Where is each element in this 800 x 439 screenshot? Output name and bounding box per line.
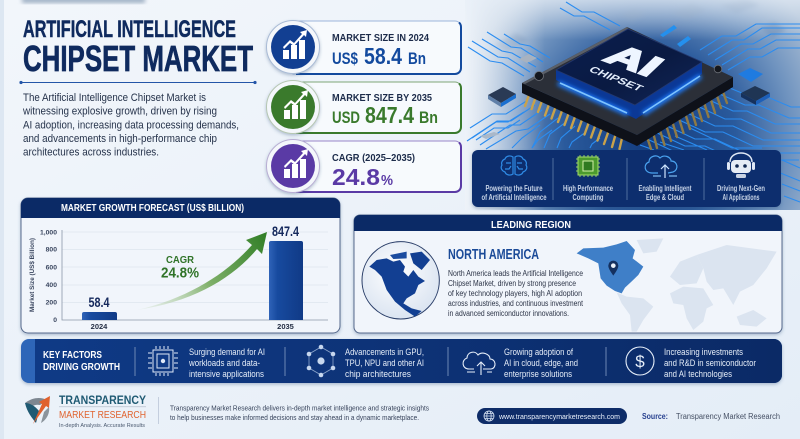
key factors heading: DRIVING GROWTH [43, 362, 120, 373]
stat card: market size 2024: Bn [408, 49, 426, 68]
stat card: CAGR: CAGR (2025–2035) [332, 153, 415, 164]
stat card: market size 2035 [266, 80, 461, 134]
region text: North America leads the Artificial Intelligence [448, 269, 584, 278]
region name: NORTH AMERICA [448, 247, 539, 263]
factor text 4: and AI technologies [664, 369, 732, 379]
footer description: to help businesses make informed decisions and stay ahead in a dynamic marketplace. [170, 413, 419, 422]
feature labels: Computing [572, 193, 604, 202]
logo: transparency market research: TRANSPARENCY [59, 395, 146, 407]
feature labels: Edge & Cloud [646, 193, 684, 202]
icon: dollar: $ [635, 352, 645, 371]
world map [577, 238, 777, 332]
stat card: CAGR: 24.8 [332, 164, 380, 190]
bar values [88, 223, 299, 310]
AI chip [522, 27, 733, 149]
icon: cloud upload [645, 156, 677, 178]
y axis title: Market Size (US$ Billion) [29, 238, 36, 312]
small components [480, 25, 770, 139]
panel: market growth forecast [21, 198, 340, 333]
stat card: market size 2024: US$ [332, 49, 358, 68]
feature labels: Powering the Future [486, 184, 543, 193]
intro text: AI adoption, increasing data processing demands, [23, 120, 239, 132]
icon: growth chart blue [283, 30, 307, 59]
logo mark [25, 396, 50, 424]
icon: network nodes [307, 345, 335, 377]
bar categories: 2024 [91, 322, 108, 331]
factor text 1: intensive applications [189, 369, 264, 379]
y axis [40, 230, 57, 324]
region text: of key technology players, high AI adoption [448, 289, 582, 298]
factor text 1: workloads and data- [188, 358, 260, 368]
feature labels: of Artificial Intelligence [482, 193, 547, 202]
map pin [608, 261, 618, 276]
intro text: The Artificial Intelligence Chipset Market is [23, 92, 206, 104]
y axis: 600 [46, 264, 57, 272]
icon: brain [501, 156, 527, 175]
intro text: and advancements in high-performance chip [23, 133, 217, 145]
chip label CHIPSET: CHIPSET [586, 65, 645, 93]
icon: dollar [626, 347, 654, 375]
chart heading: MARKET GROWTH FORECAST (US$ BILLION) [61, 203, 244, 214]
region heading: LEADING REGION [491, 220, 571, 231]
stat card: market size 2035: Bn [419, 108, 438, 127]
icon: globe [484, 411, 494, 421]
panel: key factors [21, 339, 782, 383]
CAGR label: CAGR [166, 255, 195, 266]
bar 2035 [269, 241, 303, 320]
panel: leading region [354, 215, 782, 333]
intro text [22, 92, 239, 158]
feature labels: Enabling Intelligent [638, 184, 692, 193]
circuit board background [465, 0, 800, 210]
stat card: CAGR: % [381, 172, 393, 189]
y axis: 0 [53, 317, 57, 324]
factor text 4: and R&D in semiconductor [664, 358, 756, 368]
intro text: architectures across industries. [23, 146, 159, 158]
key factors heading [43, 350, 120, 373]
stat card: CAGR [266, 140, 461, 192]
footer description [170, 404, 429, 422]
globe [362, 242, 439, 319]
bar categories: 2035 [277, 322, 294, 331]
feature labels: AI Applications [722, 193, 760, 202]
factor text 3: Growing adoption of [504, 347, 573, 357]
stat card: market size 2035: MARKET SIZE BY 2035 [332, 93, 433, 104]
title: ARTIFICIAL INTELLIGENCE [23, 16, 236, 43]
logo: transparency market research [25, 395, 146, 429]
factor text 3: enterprise solutions [504, 369, 572, 379]
factor text 3: AI in cloud, edge, and [504, 358, 578, 368]
factor text 2: chip architectures [345, 369, 411, 379]
icon: cloud upload [463, 352, 495, 375]
chip label AI: AI [596, 39, 671, 82]
website pill [477, 408, 627, 424]
bar categories [91, 322, 294, 331]
bar values: 58.4 [88, 294, 110, 310]
factor text 3 [504, 347, 578, 379]
stat card: market size 2035: 847.4 [365, 102, 414, 128]
feature labels [482, 184, 765, 202]
stat card: market size 2024: 58.4 [364, 43, 402, 69]
chip hero image [465, 0, 800, 210]
y axis: 800 [46, 246, 57, 254]
factor text 2: Advancements in GPU, [345, 347, 424, 357]
icon: growth chart green [284, 90, 308, 119]
title divider [19, 81, 257, 84]
feature labels: High Performance [563, 184, 613, 193]
icon: chip [148, 346, 178, 376]
stat card: market size 2024 [266, 20, 461, 74]
icon: growth chart purple [284, 149, 308, 178]
intro text: witnessing explosive growth, driven by rising [22, 106, 217, 118]
circuit traces [467, 2, 800, 202]
y axis: 400 [46, 282, 57, 289]
region text [448, 269, 584, 318]
icon: processor [576, 155, 600, 177]
source: Transparency Market Research [676, 412, 780, 421]
source: Source: [642, 412, 668, 421]
icon: robot [727, 153, 755, 178]
stat card: market size 2035: USD [332, 108, 360, 127]
chip pins [525, 92, 727, 149]
feature strip [472, 150, 781, 207]
stat card: market size 2024: MARKET SIZE IN 2024 [332, 33, 430, 44]
factor text 2 [345, 347, 424, 379]
CAGR label [161, 255, 199, 282]
title: CHIPSET MARKET [23, 38, 253, 79]
factor text 1: Surging demand for AI [189, 347, 265, 357]
website pill: www.transparencymarketresearch.com [498, 412, 620, 421]
factor text 2: TPU, NPU and other AI [345, 358, 424, 368]
CAGR label: 24.8% [161, 264, 199, 282]
region text: Chipset Market, driven by strong presence [448, 279, 577, 288]
feature labels: Driving Next-Gen [717, 184, 765, 193]
bar values: 847.4 [272, 223, 299, 239]
factor text 1 [188, 347, 265, 379]
y axis: 1,000 [40, 230, 57, 236]
key factors heading: KEY FACTORS [43, 350, 102, 361]
bar 2024 [82, 312, 117, 320]
y axis: 200 [46, 300, 57, 306]
factor text 4: Increasing investments [664, 347, 743, 357]
growth arrow [137, 232, 267, 310]
logo: transparency market research: In-depth Analysis. Accurate Results [59, 423, 145, 429]
region text: across industries, and continuous investment [448, 299, 584, 308]
footer description: Transparency Market Research delivers in-depth market intelligence and strategic insights [170, 404, 429, 412]
title [23, 16, 253, 79]
region text: in advanced semiconductor innovations. [448, 309, 569, 318]
logo: transparency market research: MARKET RESEARCH [59, 410, 146, 421]
factor text 4 [664, 347, 756, 379]
